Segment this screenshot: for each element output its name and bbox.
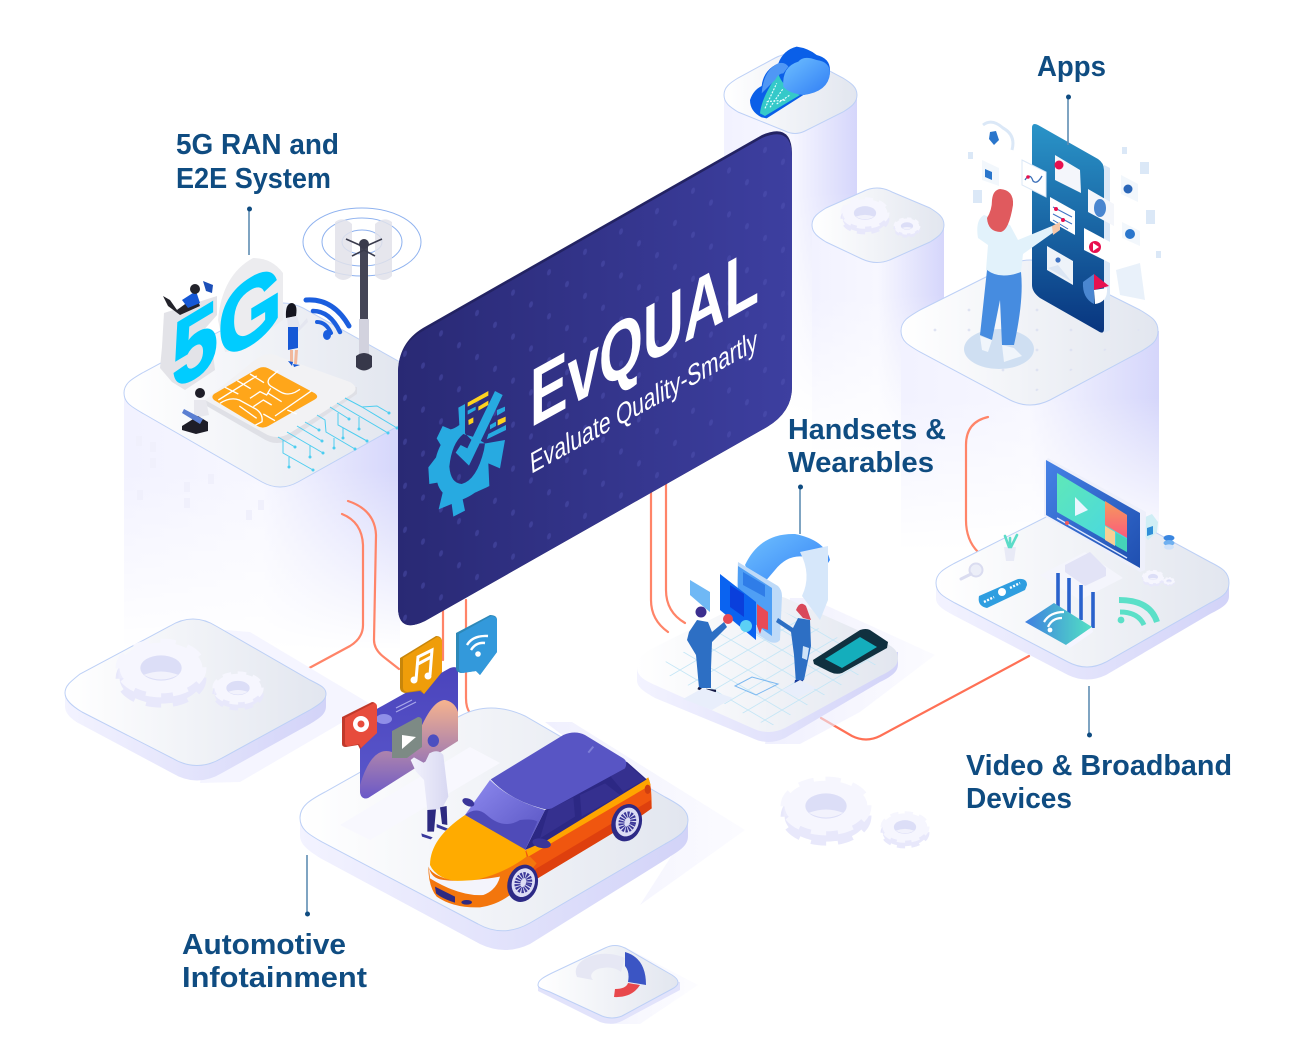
icon: watch strap (745, 534, 830, 620)
SIM card (205, 354, 357, 443)
label: Automotive Infotainment: Infotainment (182, 962, 367, 994)
phone and apps scene (964, 122, 1161, 369)
connector lines (300, 417, 1029, 740)
figure: standing woman (286, 303, 308, 367)
icon: chart tile (1022, 160, 1046, 197)
label: Video & Broadband Devices (966, 750, 1232, 815)
leader: Apps (1066, 94, 1071, 145)
icon: small box and disks (1143, 514, 1174, 550)
icon: monitor stand (1040, 552, 1123, 600)
play tile (1084, 228, 1112, 264)
icon: magnifier (961, 564, 982, 579)
pillar: cloud (724, 54, 857, 415)
platform: automotive (300, 708, 745, 950)
logo: gear check (428, 391, 506, 517)
router (1025, 573, 1093, 648)
figure: woman (776, 604, 811, 686)
icon: watch body (735, 562, 782, 643)
icon: smartphone (813, 629, 888, 674)
tagline: Evaluate Quality-Smartly (529, 323, 759, 481)
icon: cloud download (983, 122, 1013, 150)
monitor (1044, 458, 1146, 572)
5G title: 5G (172, 240, 282, 411)
platform: video and broadband (936, 458, 1229, 680)
figure: seated man (182, 388, 209, 434)
floating gears (783, 781, 928, 846)
icon: lock tile (982, 160, 999, 186)
leader: Video (1087, 686, 1092, 738)
label: Handsets & Wearables (788, 414, 946, 479)
platform: handsets (637, 595, 935, 744)
car body (428, 732, 652, 907)
label: Automotive Infotainment (182, 929, 367, 994)
label: Video & Broadband Devices: Devices (966, 783, 1072, 815)
side tiles (1116, 175, 1145, 300)
icon: wifi bubble (456, 615, 497, 675)
phone (1032, 124, 1114, 333)
icon: plant (1004, 535, 1017, 561)
icon: platform gears (118, 643, 262, 708)
label: 5G RAN and E2E System (176, 129, 339, 195)
main panel: EvQUAL (398, 131, 792, 625)
map tile (1054, 155, 1081, 193)
icon: play bubble (392, 717, 422, 758)
rear wheel (607, 800, 647, 845)
list tile (1050, 197, 1075, 235)
label: Handsets & Wearables: Handsets & (788, 414, 946, 446)
figure: woman with red hair (964, 189, 1060, 369)
floating app tiles (968, 147, 1161, 258)
icon: remote control (979, 579, 1027, 608)
front wheel (503, 861, 543, 906)
icon: music bubble (400, 636, 442, 694)
leader: Automotive (305, 855, 310, 916)
label: 5G RAN and E2E System: E2E System (176, 163, 331, 195)
icon: small gears (1143, 571, 1175, 586)
fingerprint tile (1088, 189, 1114, 226)
icon: speech bubble (690, 580, 710, 612)
pillar: apps (901, 260, 1159, 551)
pillar: gears (812, 188, 944, 455)
icon: location bubble (342, 702, 377, 749)
pie tile (1083, 274, 1109, 304)
pillar: 5G system (124, 303, 400, 650)
rings: antenna signal (303, 208, 421, 276)
figure: man (687, 606, 727, 691)
label: Handsets & Wearables: Wearables (788, 447, 934, 479)
donut chart (576, 952, 646, 997)
photo tile (1047, 246, 1073, 285)
leader: Handsets (798, 484, 803, 534)
extruded 5G sides (160, 258, 283, 390)
label: 5G RAN and E2E System: 5G RAN and (176, 129, 339, 161)
figure: lying woman (163, 281, 213, 315)
figure: doctor (411, 734, 448, 839)
car screen (360, 667, 458, 798)
watch and team on handset platform (683, 534, 888, 710)
circuit traces (278, 398, 398, 472)
car and doctor (411, 732, 652, 907)
platform: donut chart (538, 946, 698, 1024)
label: Automotive Infotainment: Automotive (182, 929, 346, 961)
5G composition (160, 208, 421, 472)
label: Video & Broadband Devices: Video & Broadband (966, 750, 1232, 782)
icon: teal wifi (1118, 600, 1157, 625)
platform: gears left (65, 619, 372, 783)
icon: blue wifi (306, 300, 349, 340)
icon: holographic screen (720, 574, 768, 640)
title: EvQUAL: EvQUAL (530, 227, 759, 446)
label: Apps: Apps (1037, 51, 1106, 83)
small floor plates (683, 677, 816, 710)
leader: 5G (247, 206, 252, 255)
icon: cloud (750, 47, 830, 118)
icon: antenna tower (335, 219, 392, 370)
icon: pillar gears (842, 199, 920, 237)
SIM chip (212, 367, 317, 428)
